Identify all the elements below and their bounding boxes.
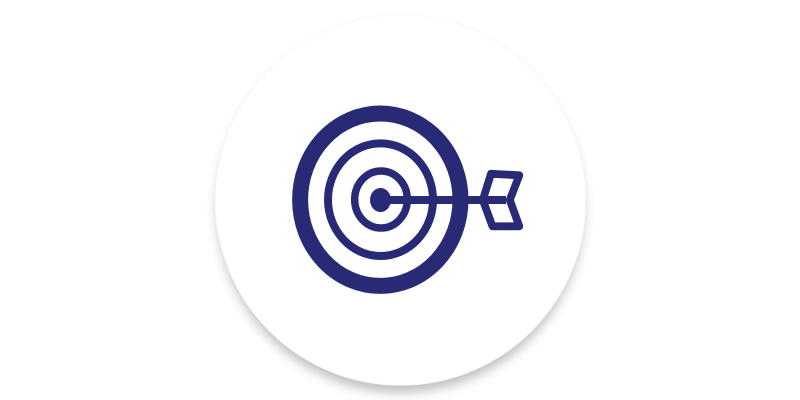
target outer ring: [300, 114, 460, 286]
arrow shaft: [380, 196, 506, 204]
icon: target with arrow: [300, 114, 519, 286]
white circular badge: [215, 14, 586, 386]
bullseye: [370, 188, 391, 212]
target inner ring: [355, 171, 407, 228]
target middle ring: [328, 143, 433, 256]
badge shadow: [218, 26, 584, 392]
arrow fletching: [483, 174, 519, 226]
